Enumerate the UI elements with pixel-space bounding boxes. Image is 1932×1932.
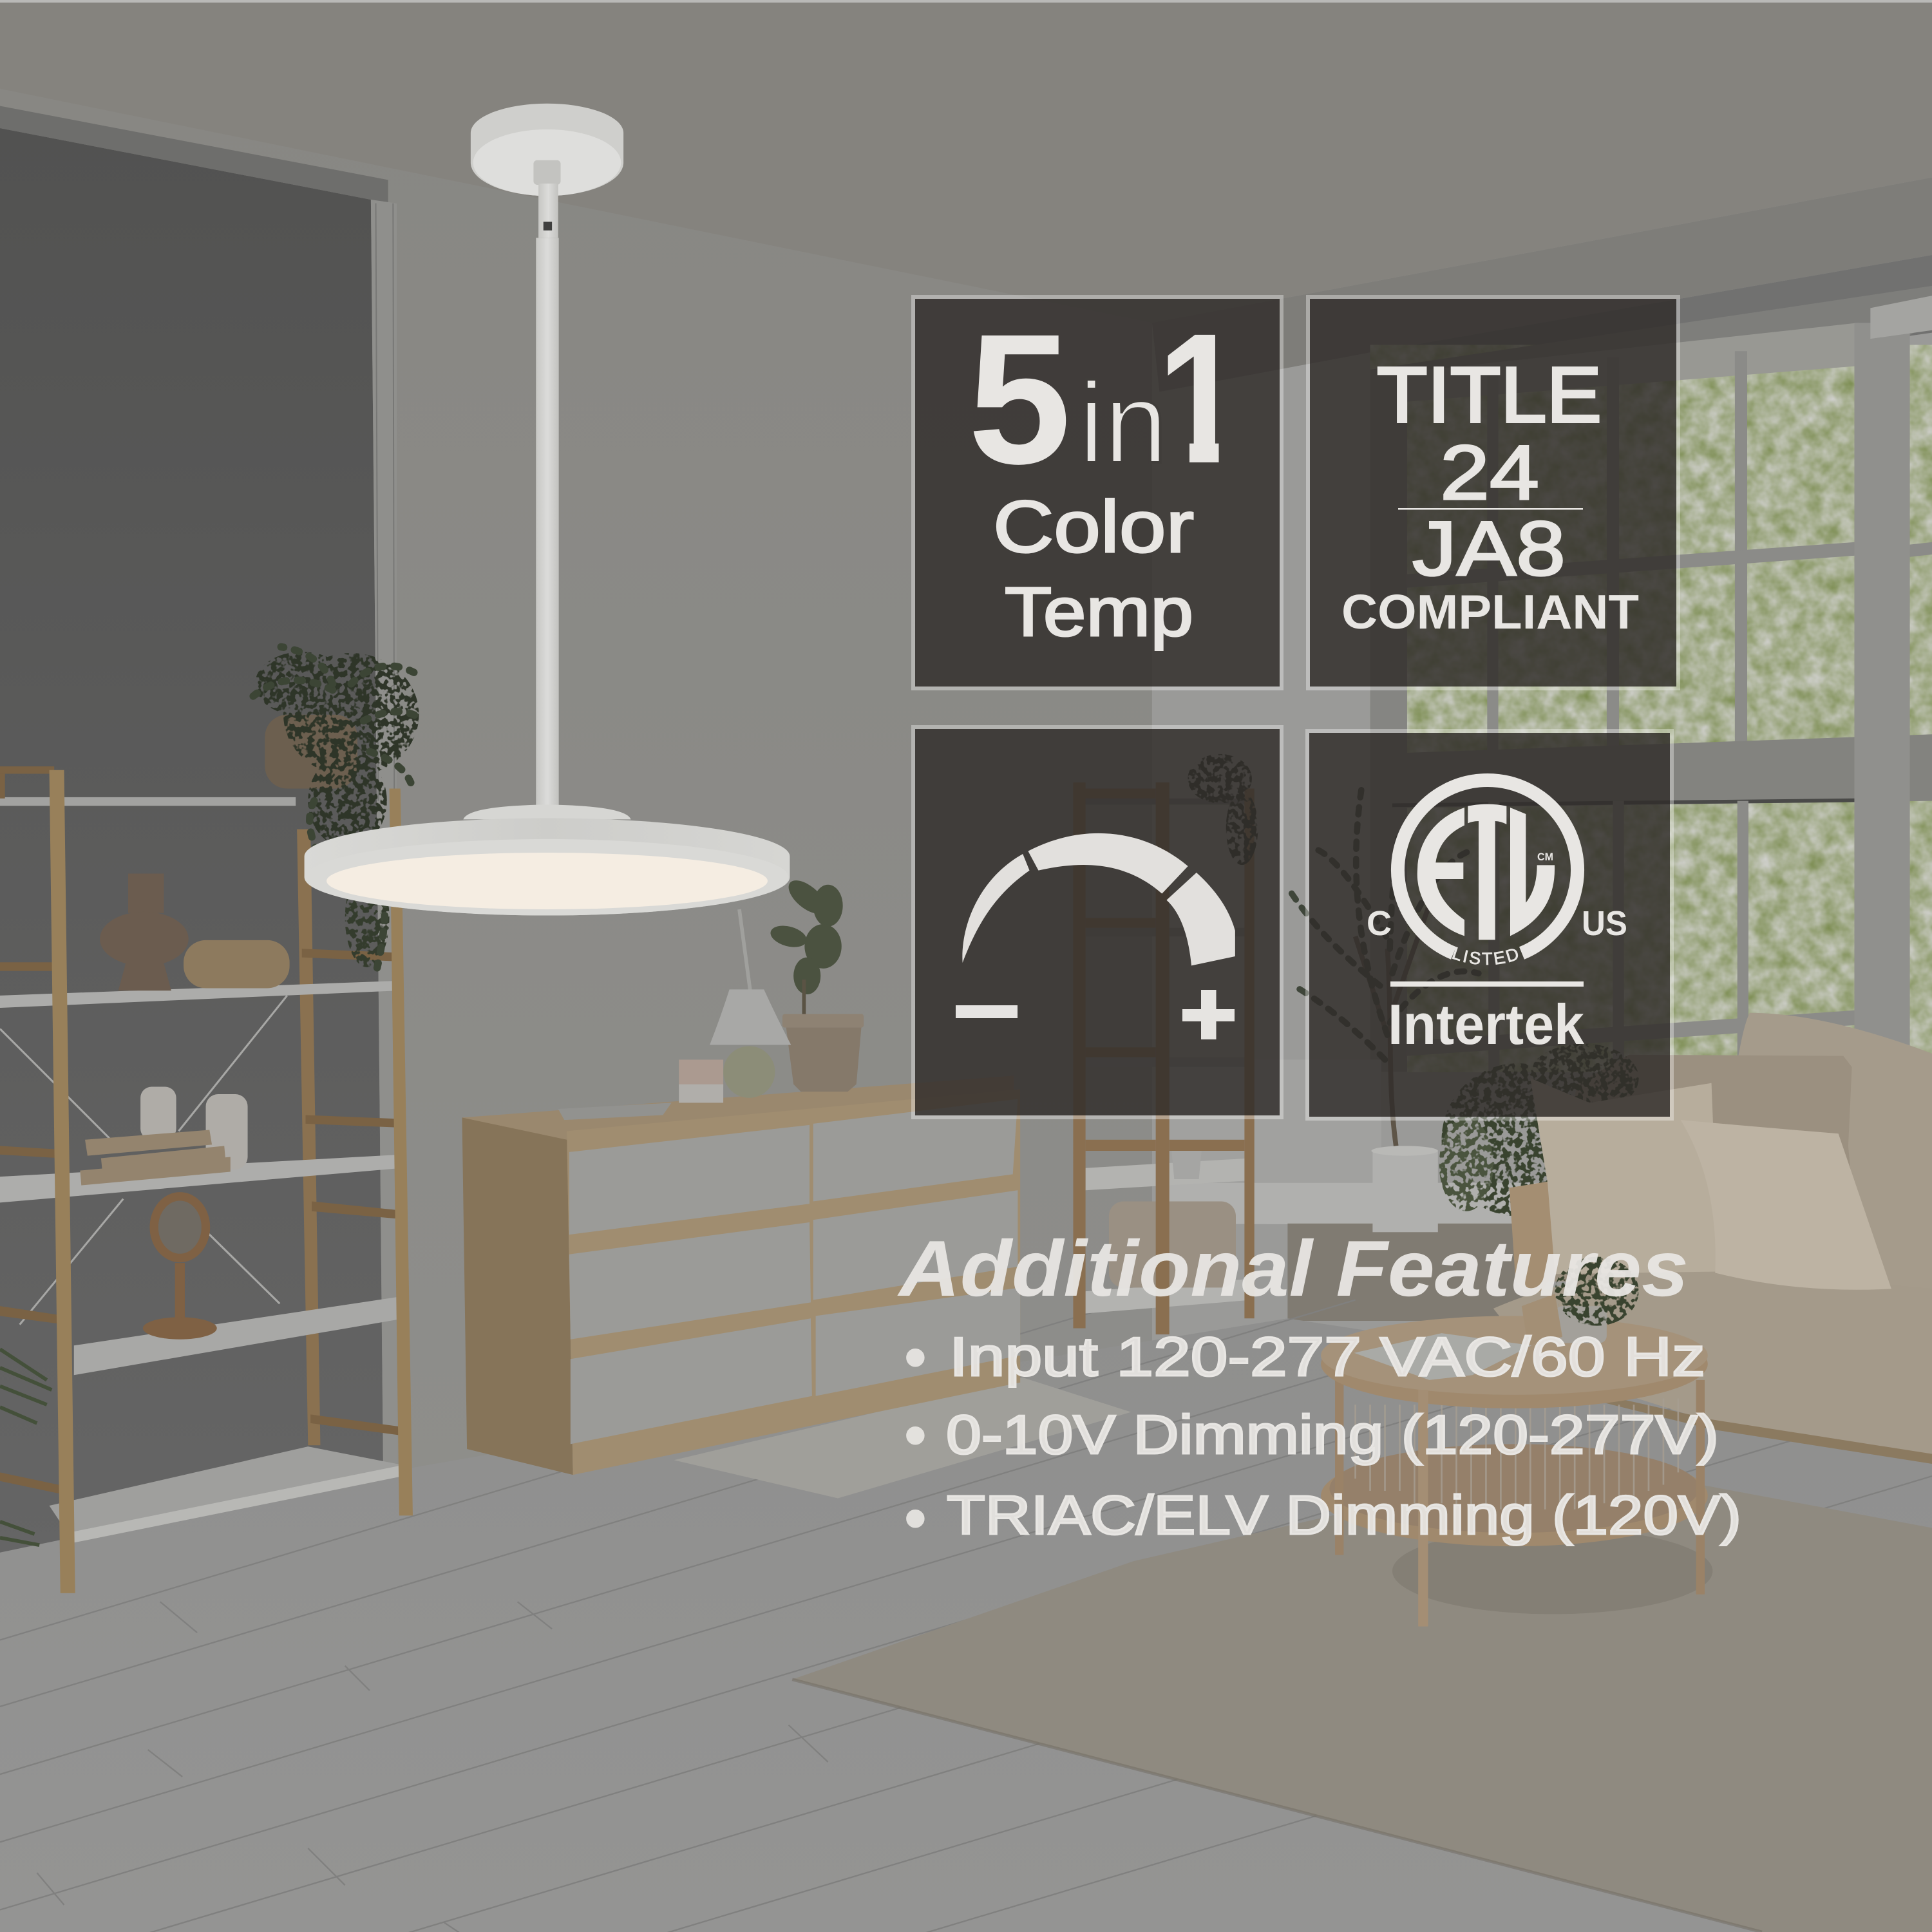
- olive tree pot: [1371, 1146, 1438, 1232]
- in: in: [1079, 359, 1168, 487]
- big 1: 1: [1157, 295, 1244, 502]
- window frames: [1370, 286, 1932, 1074]
- rug lower edge: [792, 1680, 1762, 1932]
- small potted plant: [1171, 1140, 1202, 1179]
- feature: 0-10V: [904, 1397, 1719, 1473]
- divider: [1390, 981, 1584, 987]
- C mark: C: [1367, 904, 1392, 943]
- hanging plant basket: [265, 715, 357, 788]
- icon: dimming gauge: [962, 833, 1235, 965]
- big 5: 5: [968, 296, 1071, 503]
- disc bottom rim: [305, 839, 788, 916]
- 24: 24: [1440, 430, 1539, 516]
- dresser: [462, 1075, 1020, 1475]
- table lower shelf: [1321, 1445, 1708, 1546]
- stem top: [538, 184, 558, 238]
- COMPLIANT: COMPLIANT: [1341, 585, 1639, 639]
- table lamp: [710, 989, 791, 1098]
- icon: ETL letters: [1417, 804, 1555, 940]
- panel: title 24 JA8: [1308, 297, 1678, 688]
- sofa seat: [1493, 1269, 1932, 1459]
- sofa back cushion: [1540, 1055, 1861, 1282]
- small rug: [674, 1378, 1131, 1499]
- dresser side: [462, 1117, 573, 1475]
- shelf back-right: [1073, 782, 1255, 1334]
- LISTED: LISTED: [1452, 947, 1519, 965]
- olive tree foliage: [1287, 788, 1479, 1059]
- magazine: [1354, 1333, 1531, 1380]
- table front leg: [1418, 1390, 1428, 1627]
- sofa wooden arm: [1510, 1180, 1555, 1306]
- feature list: [904, 1320, 1741, 1556]
- window wall: [1152, 178, 1932, 1479]
- vase: [100, 874, 189, 990]
- left wall: [0, 89, 1152, 1550]
- top edge: [0, 0, 1932, 3]
- sofa wood trim: [1602, 1395, 1932, 1464]
- feature: TRIAC: TRIAC/ELV Dimming (120V): [947, 1485, 1741, 1546]
- shelves: [0, 797, 296, 806]
- flower pot: [782, 1014, 864, 1092]
- lit diffuser: [327, 853, 768, 909]
- panel: ETL listed: [1305, 729, 1674, 1121]
- feature: TRIAC: [904, 1481, 1741, 1556]
- plant on back shelf: [1188, 754, 1258, 865]
- rear posts: [297, 829, 320, 1445]
- foliage mass: [255, 652, 419, 967]
- US mark: US: [1582, 904, 1627, 943]
- stem tube: [536, 238, 559, 807]
- palm leaves bottom left: [0, 1349, 52, 1545]
- window panes with trees outside: [1370, 345, 1932, 1072]
- stacked books: [80, 1130, 231, 1186]
- posts: [50, 770, 413, 1593]
- bookshelf left: [0, 766, 413, 1593]
- feature: input: [904, 1320, 1705, 1395]
- icon: minus: [956, 1005, 1018, 1018]
- drawers: [569, 1099, 1020, 1444]
- feature: 0-10V: 0-10V Dimming (120-277V): [946, 1405, 1719, 1466]
- JA8: JA8: [1412, 506, 1566, 592]
- round mirror: [143, 1197, 217, 1340]
- feature: 0-10V: •: [904, 1397, 927, 1473]
- knurled nut: [533, 160, 561, 185]
- pillow 2: [1681, 1120, 1891, 1290]
- soffit band: [1152, 178, 1932, 392]
- large rug: [792, 1466, 1932, 1932]
- rug table shadow: [1392, 1528, 1712, 1614]
- pink cup: [679, 1059, 723, 1103]
- wall above window: [1370, 255, 1932, 413]
- panel: 5 in 1 color temp: [913, 295, 1282, 688]
- icon: ETL ring: [1397, 780, 1577, 953]
- collar: [463, 804, 631, 819]
- Color: Color: [993, 486, 1194, 568]
- divider: [1398, 508, 1583, 510]
- LISTED arc text: [1391, 869, 1582, 965]
- Intertek: Intertek: [1388, 992, 1585, 1056]
- feature: input: Input 120-277 VAC/60 Hz: [949, 1327, 1705, 1388]
- brace wires: [0, 996, 287, 1325]
- Temp: Temp: [1005, 573, 1193, 650]
- table strings: [1356, 1399, 1678, 1510]
- floor: [0, 1318, 1932, 1932]
- TITLE: TITLE: [1377, 351, 1602, 439]
- pillow 1: [1530, 1078, 1719, 1274]
- framed picture behind lamp: [739, 909, 750, 992]
- canopy: [471, 104, 623, 196]
- knitted basket: [1109, 1201, 1236, 1287]
- white cups: [140, 1087, 248, 1170]
- low wall under window: [1159, 1059, 1602, 1321]
- ficus foliage: [1439, 1044, 1639, 1216]
- blind on left window: [0, 106, 397, 1553]
- CM mark: CM: [1537, 851, 1553, 863]
- table vase: [1522, 1294, 1607, 1345]
- book on dresser: [558, 1103, 672, 1120]
- coffee table: [1321, 1316, 1708, 1627]
- olive tree trunk: [1356, 887, 1435, 1146]
- heading: additional features: Additional Features: [897, 1225, 1689, 1313]
- dresser top and front frame: [462, 1075, 1014, 1140]
- icon: plus: [1182, 990, 1235, 1039]
- feature: input: •: [904, 1320, 927, 1395]
- table rear legs: [1340, 1380, 1700, 1595]
- feature: TRIAC: •: [904, 1481, 927, 1556]
- rope bowl: [184, 940, 290, 988]
- floor planks: [0, 1271, 1932, 1932]
- panel: dimming: [913, 727, 1282, 1117]
- side rungs: [0, 766, 402, 1495]
- hanging plant foliage: [247, 647, 424, 973]
- table top: [1321, 1320, 1708, 1408]
- disc side: [305, 818, 790, 916]
- table plant: [1555, 1257, 1639, 1326]
- trailing leaves: [247, 647, 424, 973]
- pendant light fixture: [305, 104, 790, 916]
- plant leaves above pot: [768, 875, 843, 1016]
- sofa back: [1735, 1013, 1932, 1306]
